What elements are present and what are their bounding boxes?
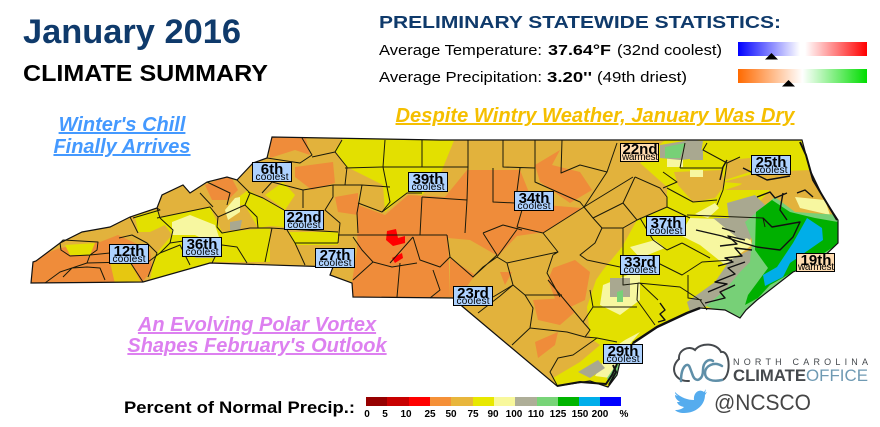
- rank label: 39th coolest: coolest: [412, 182, 445, 193]
- rank label: 12th coolest: [110, 243, 148, 265]
- precipitation shading: [32, 138, 838, 386]
- rank label: 33rd coolest: coolest: [624, 265, 657, 276]
- legend scale labels: 100: [506, 409, 523, 420]
- heading: winter's chill: Winter's Chill: [59, 114, 186, 136]
- legend scale labels: 10: [400, 409, 412, 420]
- rank label: 25th coolest: 25th: [756, 154, 786, 171]
- rank label: 12th coolest: coolest: [112, 254, 146, 265]
- icon: cloud: [674, 345, 729, 381]
- precipitation statistic: (49th driest): [597, 69, 687, 86]
- rank label: 29th coolest: coolest: [606, 354, 640, 365]
- legend: percent of normal precipitation: [124, 397, 629, 420]
- heading: despite wintry weather: Despite Wintry Weather, January Was Dry: [396, 105, 795, 127]
- rank label: 22nd warmest: 22nd: [622, 141, 658, 158]
- title: [23, 13, 268, 86]
- rank label: 37th coolest: 37th: [651, 215, 681, 232]
- precipitation statistic: [379, 69, 687, 86]
- legend scale labels: 110: [528, 409, 545, 420]
- icon: twitter bird: [675, 389, 707, 413]
- title: January 2016: [23, 13, 241, 51]
- heading: winter's chill: [53, 114, 191, 158]
- temperature statistic: (32nd coolest): [617, 42, 722, 59]
- rank label: 27th coolest: [316, 247, 354, 269]
- rank label: 23rd coolest: [454, 285, 492, 307]
- legend scale labels: 5: [382, 409, 388, 420]
- legend scale labels: 25: [424, 409, 436, 420]
- rank label: 36th coolest: [182, 236, 222, 258]
- temperature gauge: [738, 42, 867, 60]
- legend scale labels: 90: [487, 409, 499, 420]
- rank label: 23rd coolest: 23rd: [457, 285, 489, 302]
- heading: polar vortex: Shapes February's Outlook: [127, 335, 388, 357]
- logo: NC Climate Office: [674, 345, 868, 415]
- rank label: 23rd coolest: coolest: [456, 296, 490, 307]
- legend colour bar: [366, 397, 621, 406]
- rank label: 27th coolest: 27th: [320, 247, 350, 264]
- rank label: 25th coolest: [752, 154, 790, 176]
- legend scale labels: 50: [445, 409, 457, 420]
- rank label: 19th warmest: 19th: [801, 252, 831, 269]
- logo wordmark: OFFICE: [806, 366, 868, 385]
- state outline: [31, 137, 838, 387]
- temperature statistic: Average Temperature:: [379, 42, 542, 59]
- rank label: 36th coolest: coolest: [186, 247, 219, 258]
- sounds and inlets: [557, 142, 837, 386]
- rank label: 36th coolest: 36th: [187, 236, 217, 253]
- rank label: 22nd coolest: coolest: [288, 220, 321, 231]
- rank label: 33rd coolest: 33rd: [624, 254, 656, 271]
- map: percent of normal precipitation: [20, 130, 850, 400]
- legend scale labels: 150: [572, 409, 589, 420]
- heading: polar vortex: [127, 314, 388, 357]
- rank label: 39th coolest: [408, 171, 448, 193]
- temperature statistic: [379, 42, 722, 59]
- precipitation statistic: 3.20'': [547, 69, 592, 86]
- rank label: 6th coolest: 6th: [261, 161, 283, 178]
- logo wordmark: NORTH CAROLINA: [733, 357, 868, 367]
- legend title: Percent of Normal Precip.:: [124, 399, 355, 417]
- temperature statistic: 37.64°F: [548, 42, 611, 59]
- rank label: 29th coolest: 29th: [608, 343, 638, 360]
- logo wordmark: [733, 357, 868, 385]
- county boundaries: [45, 138, 765, 385]
- rank label: 25th coolest: coolest: [754, 165, 788, 176]
- legend scale labels: %: [620, 409, 629, 420]
- rank label: 22nd coolest: [284, 209, 324, 231]
- rank label: 34th coolest: [514, 190, 554, 212]
- rank label: 34th coolest: 34th: [519, 190, 549, 207]
- legend scale labels: 75: [467, 409, 479, 420]
- rank label: 33rd coolest: [620, 254, 660, 276]
- legend scale labels: 200: [592, 409, 609, 420]
- legend scale labels: 125: [550, 409, 567, 420]
- rank label: 22nd coolest: 22nd: [286, 209, 322, 226]
- statistics heading: PRELIMINARY STATEWIDE STATISTICS:: [379, 12, 781, 32]
- heading: polar vortex: An Evolving Polar Vortex: [137, 314, 377, 336]
- rank label: 19th warmest: warmest: [797, 262, 834, 273]
- twitter handle: @NCSCO: [714, 390, 811, 415]
- legend scale labels: [364, 409, 629, 420]
- rank label: 39th coolest: 39th: [413, 171, 443, 188]
- heading: winter's chill: Finally Arrives: [53, 136, 191, 158]
- title: CLIMATE SUMMARY: [23, 60, 268, 86]
- precipitation statistic: Average Precipitation:: [379, 69, 542, 86]
- rank label: 12th coolest: 12th: [114, 243, 144, 260]
- rank label: 34th coolest: coolest: [518, 201, 551, 212]
- rank label: 37th coolest: coolest: [650, 226, 683, 237]
- rank label: 37th coolest: [646, 215, 686, 237]
- rank label: 6th coolest: [252, 161, 292, 183]
- rank label: 27th coolest: coolest: [318, 258, 352, 269]
- rank label: 29th coolest: [604, 343, 642, 365]
- rank label: 22nd warmest: warmest: [621, 152, 658, 163]
- precipitation gauge: [738, 69, 867, 86]
- logo wordmark: CLIMATE: [733, 366, 806, 385]
- rank label: 6th coolest: coolest: [256, 172, 289, 183]
- legend scale labels: 0: [364, 409, 370, 420]
- panel: preliminary statewide statistics: [379, 12, 867, 86]
- rank label: 19th warmest: [796, 252, 834, 273]
